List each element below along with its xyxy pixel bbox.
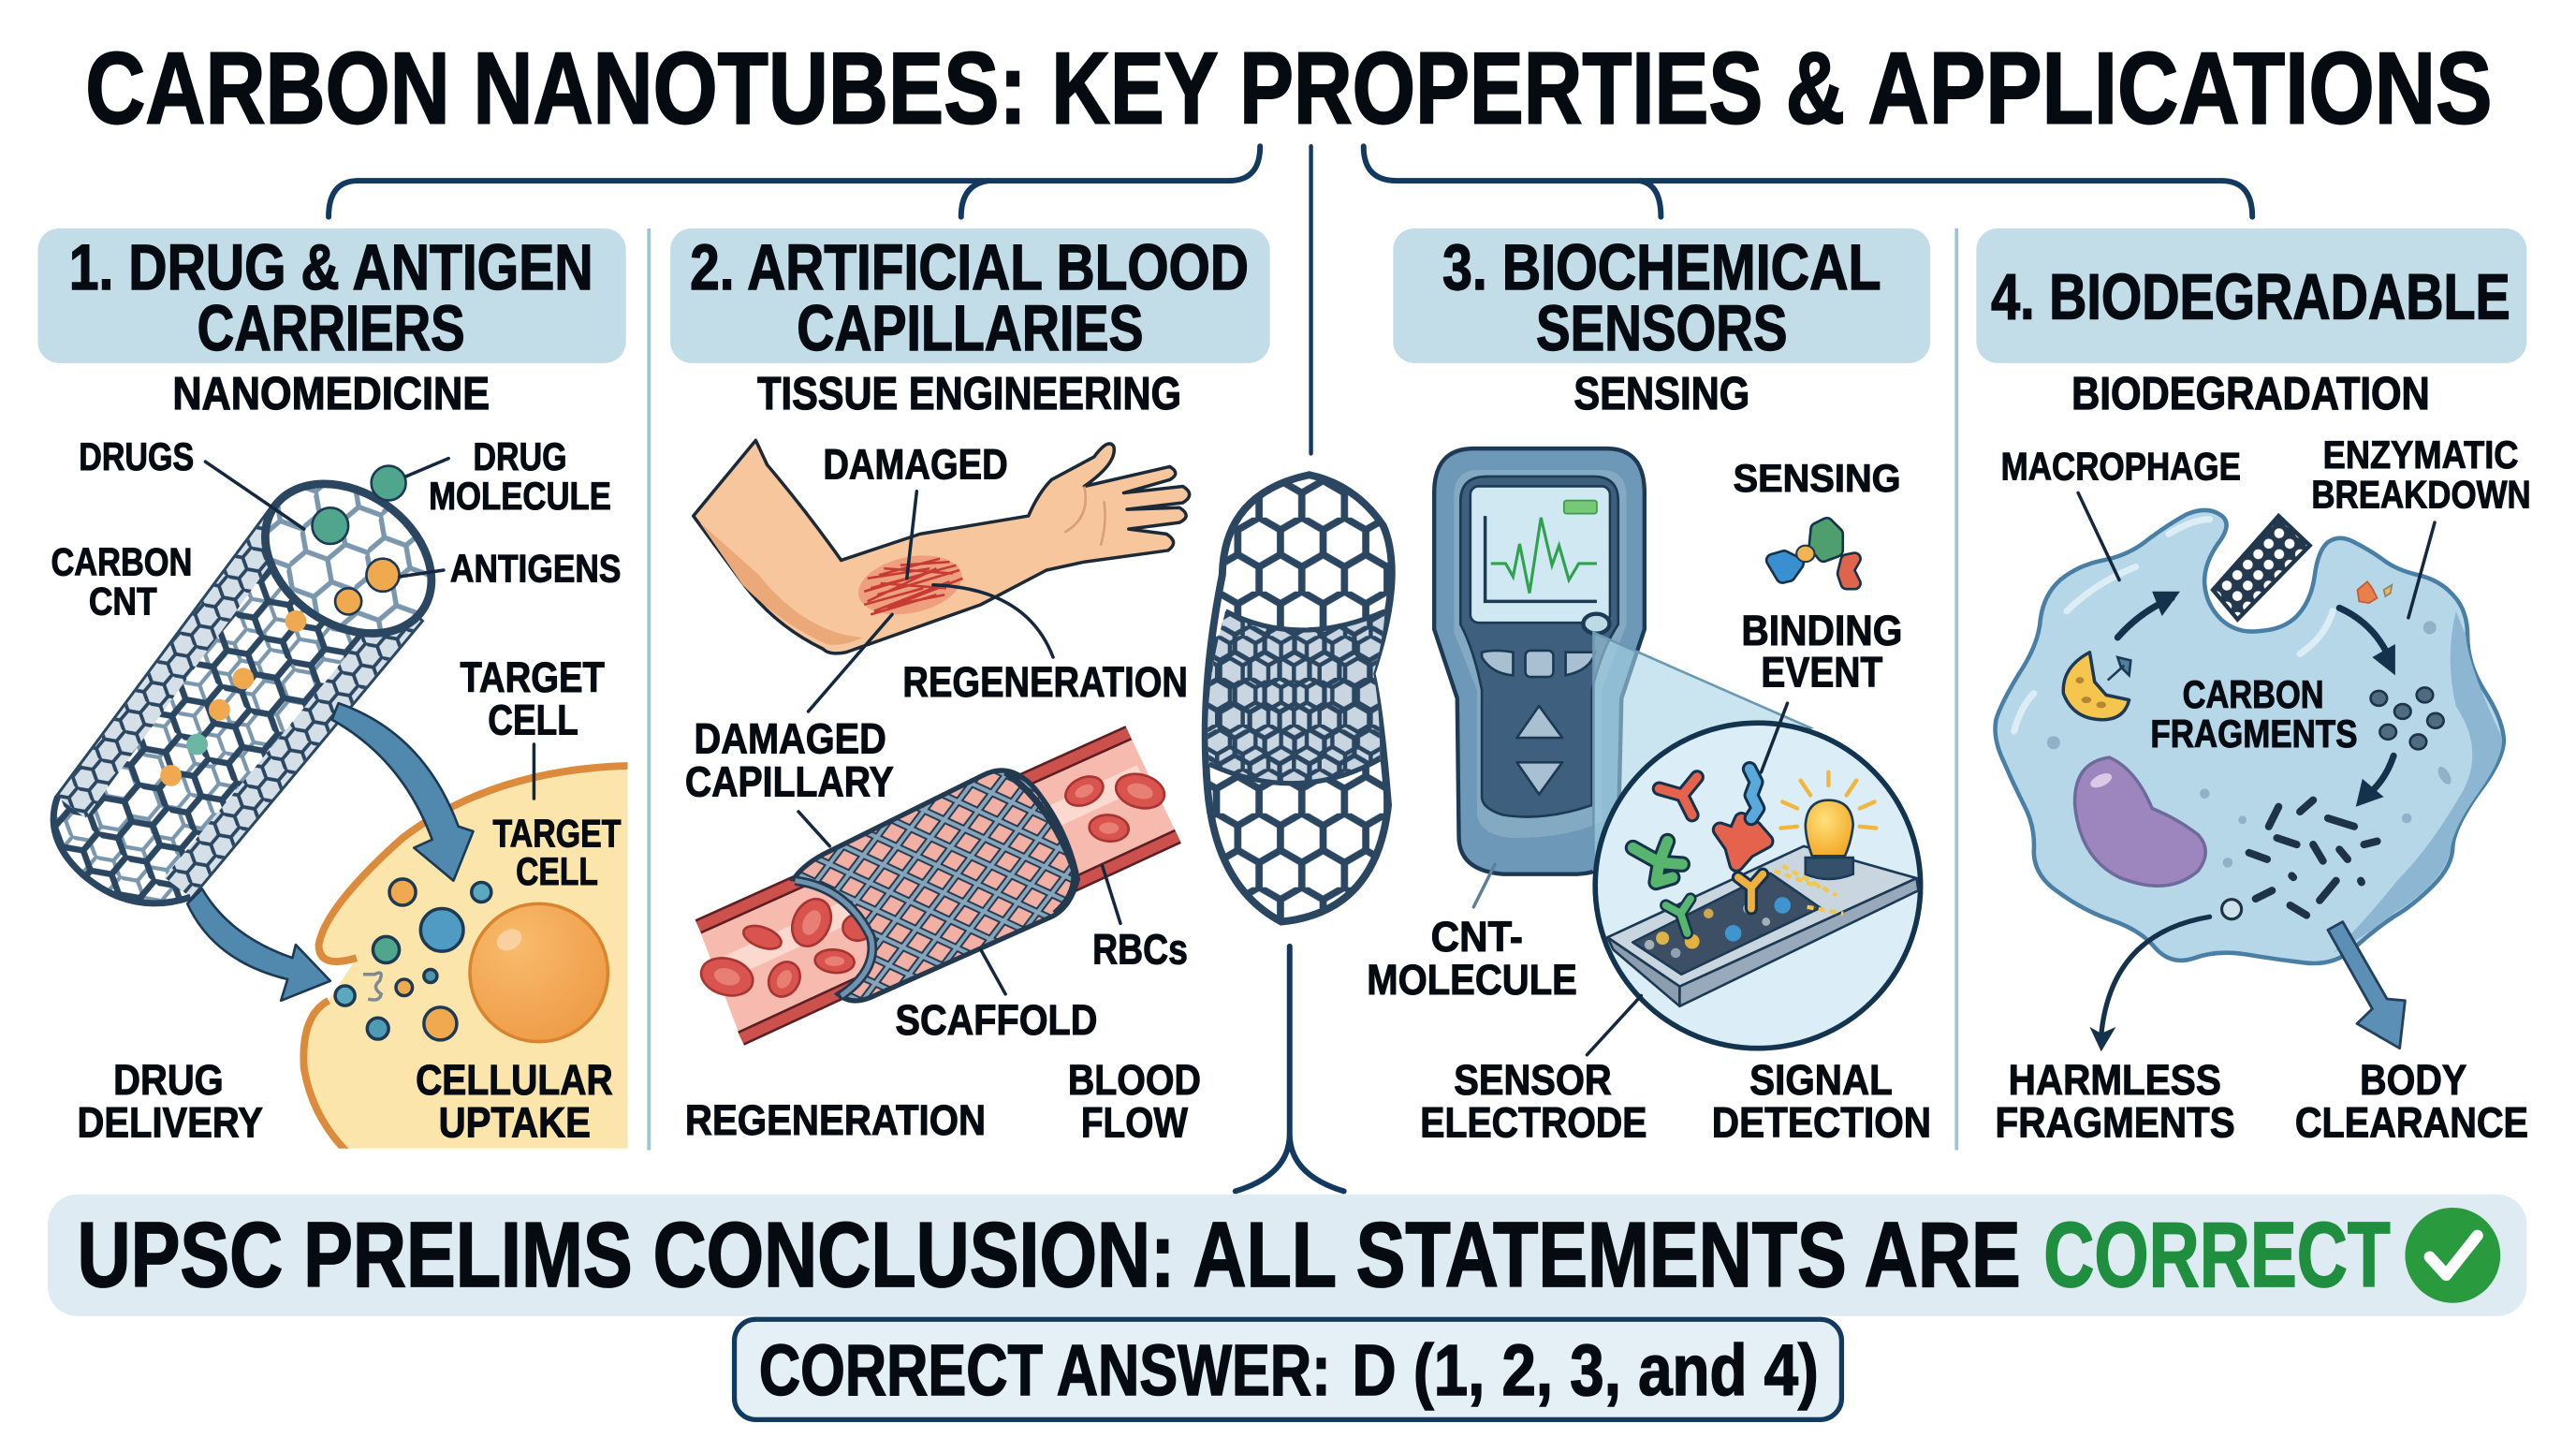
labels panel 1 <box>51 434 622 1146</box>
molecules and receptors <box>1633 769 1766 933</box>
correct answer box: CORRECT ANSWER: <box>759 1330 1331 1411</box>
labels panel 4: HARMLESS <box>2009 1056 2221 1104</box>
title: CARBON NANOTUBES: <box>85 32 1027 146</box>
labels panel 4: FRAGMENTS <box>2150 712 2358 756</box>
labels panel 3: SIGNAL <box>1749 1056 1893 1104</box>
labels panel 4 <box>1996 433 2531 1146</box>
labels panel 1: DRUG <box>474 434 567 478</box>
labels panel 4: CARBON <box>2183 672 2324 716</box>
labels panel 3: SENSING <box>1734 456 1901 500</box>
correct answer box: D (1, 2, 3, and 4) <box>1352 1330 1819 1411</box>
lysosome <box>2063 653 2130 720</box>
header: panel 1 <box>37 228 626 364</box>
labels panel 4: FRAGMENTS <box>1996 1098 2235 1146</box>
panel: biodegradable <box>1976 228 2531 1146</box>
cnt scaffold mesh <box>794 770 1077 1001</box>
signal bulb <box>1781 772 1876 879</box>
enzyme fragment <box>2358 581 2392 603</box>
subheading: nanomedicine: NANOMEDICINE <box>172 369 490 419</box>
arrows inside cell <box>2117 592 2395 807</box>
subheading: biodegradation: BIODEGRADATION <box>2071 369 2430 419</box>
connector: left bracket <box>329 146 1260 217</box>
labels panel 4: BREAKDOWN <box>2311 472 2531 516</box>
correct answer box <box>735 1319 1841 1419</box>
labels panel 3: BINDING <box>1741 607 1902 654</box>
arrow: harmless fragments <box>2089 917 2210 1051</box>
labels panel 2: SCAFFOLD <box>896 996 1097 1044</box>
labels panel 1: MOLECULE <box>429 474 611 518</box>
central nanotube illustration <box>1206 475 1392 922</box>
labels panel 1: CELL <box>488 696 578 743</box>
labels panel 3: ELECTRODE <box>1420 1098 1647 1146</box>
labels panel 3: DETECTION <box>1712 1098 1931 1146</box>
labels panel 2 <box>685 441 1201 1146</box>
zoom beam <box>1593 633 1810 871</box>
capillary vessel <box>697 733 1178 1038</box>
header: panel 3: 3. BIOCHEMICAL <box>1442 231 1881 303</box>
carbon dots <box>2371 687 2444 749</box>
labels panel 1: DELIVERY <box>78 1098 263 1146</box>
labels panel 1: TARGET <box>493 812 622 856</box>
labels panel 4: ENZYMATIC <box>2323 433 2519 477</box>
labels panel 3: EVENT <box>1761 649 1882 697</box>
nucleus <box>2075 757 2205 886</box>
header: panel 3 <box>1393 228 1930 364</box>
red blood cells <box>697 769 1168 1003</box>
labels panel 2: RBCs <box>1092 925 1188 973</box>
small vesicles <box>2047 621 2453 868</box>
labels panel 1: CELL <box>516 849 598 893</box>
labels panel 1: DRUGS <box>79 434 194 478</box>
labels panel 3: SENSOR <box>1454 1056 1612 1104</box>
ingested nanotube <box>2213 516 2310 620</box>
title <box>85 32 2492 146</box>
labels panel 2: CAPILLARY <box>685 757 894 805</box>
header: panel 2 <box>670 228 1270 364</box>
labels panel 4: MACROPHAGE <box>2001 444 2241 488</box>
arrow: to target cell <box>332 703 474 881</box>
divider lines <box>649 228 1956 1151</box>
header: panel 2: 2. ARTIFICIAL BLOOD <box>690 231 1249 303</box>
labels panel 3: CNT- <box>1431 913 1523 961</box>
connector: right bracket <box>1364 146 2252 217</box>
labels panel 2: REGENERATION <box>902 658 1188 706</box>
target cell <box>303 766 631 1153</box>
labels panel 1: CARBON <box>51 539 192 583</box>
labels panel 2: REGENERATION <box>685 1096 986 1144</box>
handheld sensor device <box>1434 448 1645 874</box>
labels panel 1: TARGET <box>460 653 605 701</box>
title: & <box>1786 32 1845 146</box>
header: panel 3: SENSORS <box>1536 292 1788 364</box>
panel: artificial blood capillaries <box>670 228 1270 1146</box>
icon: injured arm <box>694 440 1190 653</box>
leader lines panel 4 <box>2078 493 2435 618</box>
connector: centre line top <box>1310 146 1312 453</box>
panel: drug and antigen carriers <box>37 228 631 1153</box>
labels panel 4: CLEARANCE <box>2295 1098 2528 1146</box>
leader lines panel 1 <box>205 459 534 799</box>
arrow: drug delivery <box>187 888 330 1001</box>
labels panel 2: DAMAGED <box>695 715 886 763</box>
icon: sensing molecule <box>1773 524 1854 583</box>
labels panel 4: BODY <box>2360 1056 2466 1104</box>
conclusion banner: UPSC PRELIMS CONCLUSION: ALL STATEMENTS ARE <box>78 1203 2021 1306</box>
labels panel 2: FLOW <box>1081 1098 1189 1146</box>
labels panel 2: BLOOD <box>1068 1056 1201 1104</box>
title: KEY PROPERTIES <box>1051 32 1763 146</box>
leader lines panel 3 <box>1473 703 1788 1055</box>
harmless rod fragments <box>2249 800 2378 916</box>
conclusion banner: CORRECT <box>2043 1203 2391 1306</box>
labels panel 1: CELLULAR <box>416 1056 613 1104</box>
labels panel 1: ANTIGENS <box>450 546 621 590</box>
labels panel 3 <box>1367 456 1931 1146</box>
icon: green check <box>2405 1208 2500 1303</box>
electrode platform <box>1607 846 1918 1006</box>
header: panel 4 <box>1976 228 2526 363</box>
magnified sensor view <box>1595 723 1921 1049</box>
header: panel 1: 1. DRUG & ANTIGEN <box>69 231 593 303</box>
subheading: tissue engineering: TISSUE ENGINEERING <box>757 369 1181 419</box>
macrophage cell <box>1996 510 2504 963</box>
labels panel 1: UPTAKE <box>439 1098 591 1146</box>
arrow: body clearance <box>2328 922 2405 1049</box>
labels panel 3: MOLECULE <box>1367 956 1577 1004</box>
panel: biochemical sensors <box>1367 228 1931 1146</box>
labels panel 1: DRUG <box>113 1056 224 1104</box>
icon: free drug molecule <box>372 466 406 500</box>
header: panel 1: CARRIERS <box>198 292 465 364</box>
subheading: sensing: SENSING <box>1573 369 1749 419</box>
leader lines panel 2 <box>798 492 1120 994</box>
labels panel 2: DAMAGED <box>823 441 1008 489</box>
labels panel 1: CNT <box>89 579 157 623</box>
header: panel 2: CAPILLARIES <box>797 292 1144 364</box>
connector: centre line bottom <box>1236 946 1344 1191</box>
cnt tube carrier <box>53 453 460 903</box>
